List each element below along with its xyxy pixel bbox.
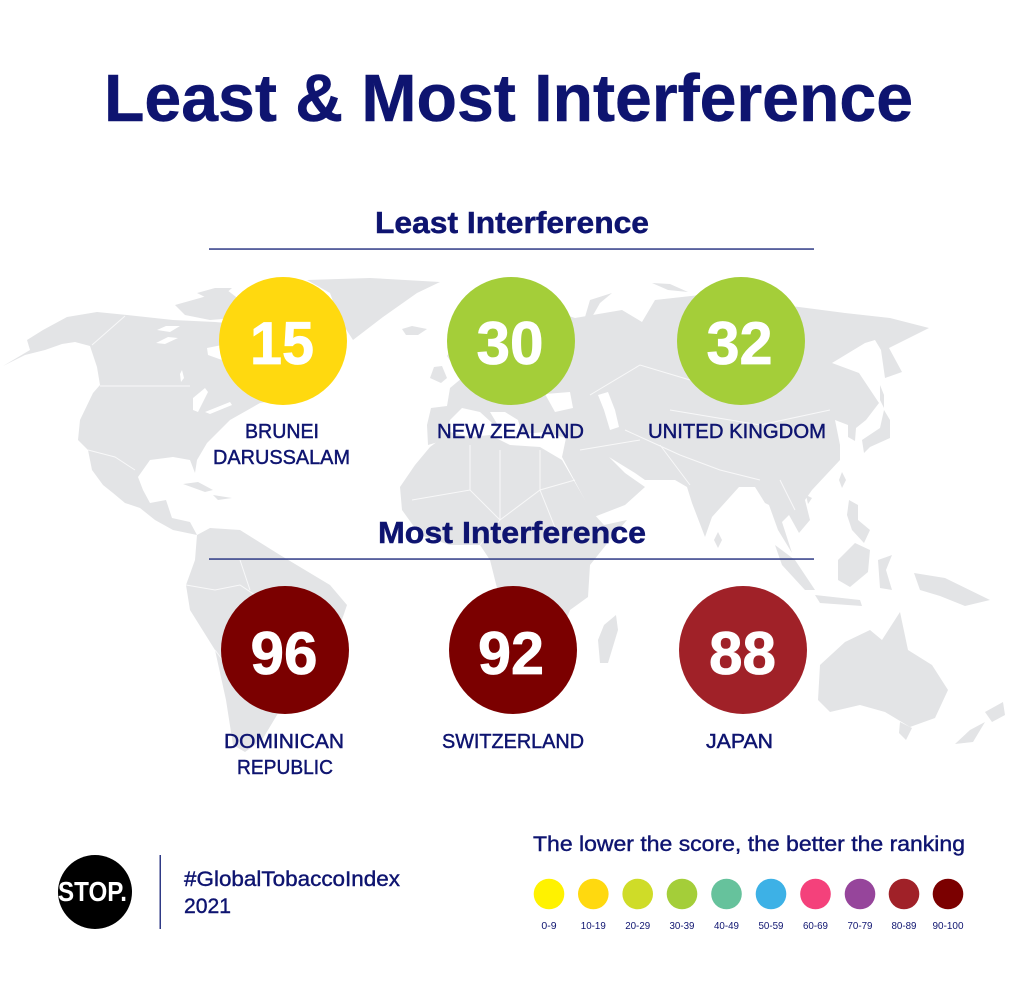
score: United Kingdom 32 <box>648 277 826 443</box>
score: New Zealand 30 <box>437 277 584 443</box>
world map background <box>3 278 1005 752</box>
score: Brunei Darussalam 15: BRUNEI <box>245 421 319 443</box>
score: Switzerland 92: SWITZERLAND <box>442 731 584 753</box>
legend: score colour key: 50-59 <box>758 920 784 932</box>
score: Japan 88: 88 <box>709 620 776 687</box>
score: Brunei Darussalam 15: 15 <box>250 310 314 377</box>
score: Brunei Darussalam 15: DARUSSALAM <box>213 447 350 469</box>
legend: score colour key: 0-9 <box>541 920 557 932</box>
legend: score colour key: 40-49 <box>714 920 739 932</box>
heading: least interference: Least Interference <box>375 205 649 240</box>
score: New Zealand 30: 30 <box>476 310 544 377</box>
score: Dominican Republic 96 <box>221 586 349 779</box>
score: Dominican Republic 96: 96 <box>250 620 318 687</box>
legend: score colour key: The lower the score, the better the ranking <box>533 833 965 856</box>
score: Brunei Darussalam 15 <box>213 277 350 469</box>
divider line and hashtag: #GlobalTobaccoIndex <box>184 868 401 891</box>
score: Japan 88: JAPAN <box>706 731 773 753</box>
title: Least & Most Interference <box>104 61 913 136</box>
score: United Kingdom 32: UNITED KINGDOM <box>648 421 826 443</box>
legend: score colour key: 10-19 <box>581 920 606 932</box>
divider line and hashtag: 2021 <box>184 895 231 918</box>
score: United Kingdom 32: 32 <box>706 310 772 377</box>
legend: score colour key: 80-89 <box>892 920 917 932</box>
legend: score colour key <box>533 833 965 932</box>
score: Dominican Republic 96: DOMINICAN <box>224 731 344 753</box>
heading: most interference: Most Interference <box>378 515 646 550</box>
score: Switzerland 92: 92 <box>478 620 544 687</box>
score: Dominican Republic 96: REPUBLIC <box>237 757 333 779</box>
logo: STOP <box>58 855 132 929</box>
logo: STOP: STOP. <box>58 876 127 907</box>
score: New Zealand 30: NEW ZEALAND <box>437 421 584 443</box>
score: Switzerland 92 <box>442 586 584 753</box>
divider line and hashtag <box>160 855 401 929</box>
legend: score colour key: 20-29 <box>625 920 650 932</box>
score: Japan 88 <box>679 586 807 753</box>
legend: score colour key: 60-69 <box>803 920 828 932</box>
legend: score colour key: 30-39 <box>670 920 695 932</box>
legend: score colour key: 70-79 <box>848 920 873 932</box>
legend: score colour key: 90-100 <box>932 920 964 932</box>
